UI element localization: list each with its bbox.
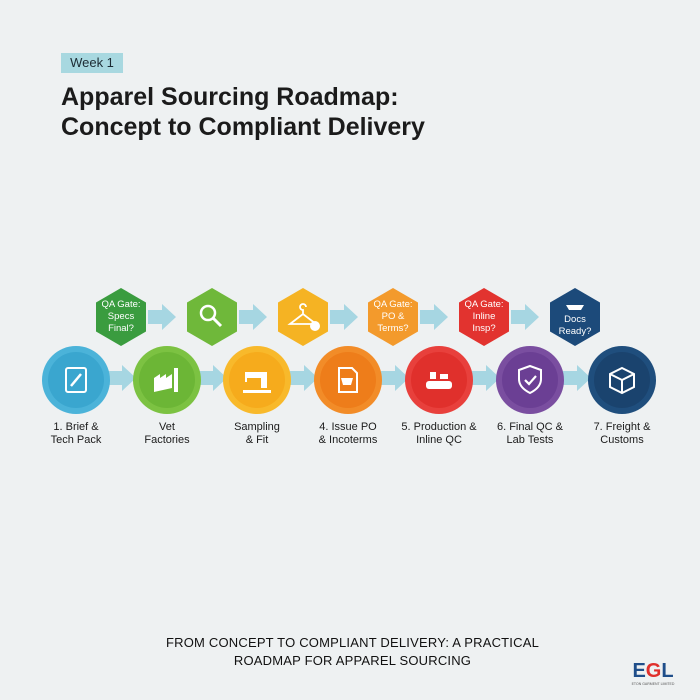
step labels: Tech Pack <box>51 434 102 446</box>
week tag: Week 1 <box>70 55 114 70</box>
title: Concept to Compliant Delivery <box>61 113 425 141</box>
step labels: Vet <box>159 421 175 433</box>
hex 1: QA gate specs: Specs <box>108 311 134 322</box>
hex 6: docs ready <box>550 288 600 346</box>
hex 3: hanger <box>278 288 328 346</box>
circle 1: brief <box>42 346 110 414</box>
footer caption <box>166 635 539 668</box>
title <box>61 83 425 141</box>
step labels: Factories <box>144 434 190 446</box>
step labels: Inline QC <box>416 434 462 446</box>
hex 4: QA gate PO: QA Gate: <box>373 299 413 310</box>
step labels: 7. Freight & <box>594 421 651 433</box>
step labels: 4. Issue PO <box>319 421 377 433</box>
hex 4: QA gate PO: PO & <box>382 311 405 322</box>
hex 6: docs ready: Ready? <box>559 326 591 337</box>
step labels: Sampling <box>234 421 280 433</box>
title: Apparel Sourcing Roadmap: <box>61 83 399 111</box>
footer caption: ROADMAP FOR APPAREL SOURCING <box>234 653 471 668</box>
hex 4: QA gate PO <box>368 288 418 346</box>
footer caption: FROM CONCEPT TO COMPLIANT DELIVERY: A PRACTICAL <box>166 635 539 650</box>
hex 5: QA gate inline: QA Gate: <box>464 299 504 310</box>
step labels: 5. Production & <box>401 421 477 433</box>
hex 1: QA gate specs <box>96 288 146 346</box>
hex 5: QA gate inline: Inline <box>473 311 495 322</box>
step labels: Lab Tests <box>507 434 554 446</box>
step labels <box>51 421 651 446</box>
circle 2: factory <box>133 346 201 414</box>
arrows: bottom row <box>108 365 591 391</box>
week tag <box>61 53 123 73</box>
circle 3: sewing machine <box>223 346 291 414</box>
step labels: 1. Brief & <box>53 421 99 433</box>
hex 5: QA gate inline <box>459 288 509 346</box>
logo: ETON GARMENT LIMITED <box>632 682 675 686</box>
hex 2: magnifier <box>187 288 237 346</box>
hex 1: QA gate specs: QA Gate: <box>101 299 141 310</box>
hex 4: QA gate PO: Terms? <box>377 323 409 334</box>
circle 6: shield <box>496 346 564 414</box>
circle 7: box <box>588 346 656 414</box>
hex 5: QA gate inline: Insp? <box>472 323 496 334</box>
step labels: 6. Final QC & <box>497 421 564 433</box>
hex 6: docs ready: Docs <box>564 314 586 325</box>
step labels: Customs <box>600 434 644 446</box>
circle 4: PO <box>314 346 382 414</box>
step labels: & Incoterms <box>319 434 378 446</box>
hex 1: QA gate specs: Final? <box>108 323 134 334</box>
circle 5: production <box>405 346 473 414</box>
logo: EGL <box>632 660 674 682</box>
arrows: top row <box>148 304 539 330</box>
step labels: & Fit <box>246 434 268 446</box>
